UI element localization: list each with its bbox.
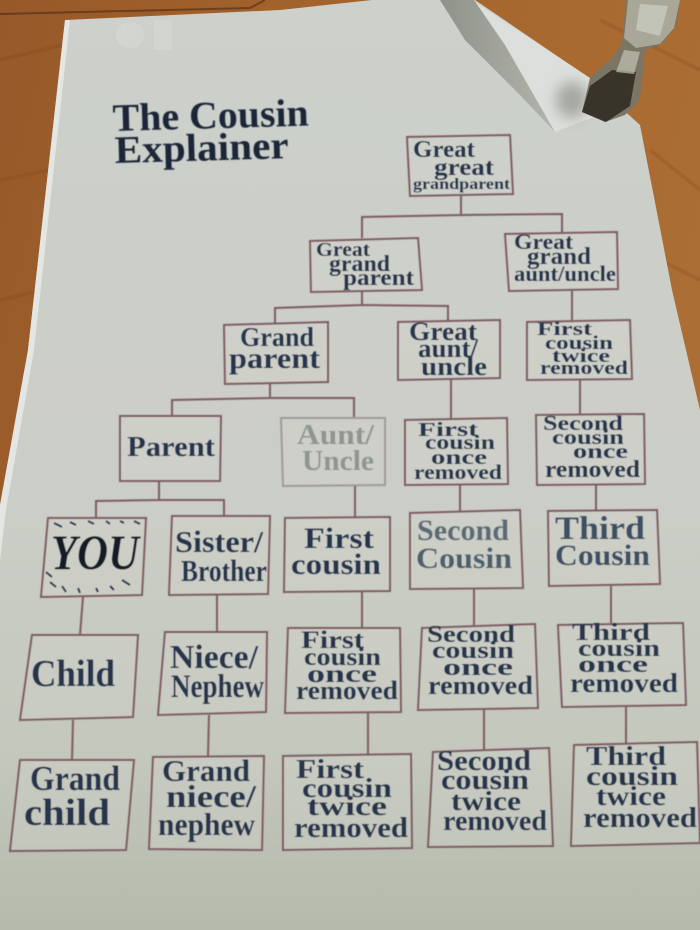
folded cloth corner xyxy=(440,0,625,132)
box: second cousin once removed: Second xyxy=(427,622,516,648)
faint show-through mark xyxy=(116,20,172,50)
box: aunt/uncle xyxy=(281,418,385,486)
box: great grand aunt/uncle: aunt/uncle xyxy=(514,261,616,286)
box: second cousin once removed: removed xyxy=(428,671,534,700)
box: aunt/uncle: Uncle xyxy=(302,445,374,477)
box: great grandparent: parent xyxy=(343,265,414,290)
box: great grandparent xyxy=(310,238,422,292)
box: first cousin once removed (upper): First xyxy=(418,419,478,441)
box: second cousin: Second xyxy=(417,514,509,547)
box: aunt/uncle: Aunt/ xyxy=(297,419,375,451)
box: grandparent xyxy=(224,322,328,384)
box: first cousin once removed: cousin xyxy=(304,644,381,671)
box: grandchild: Grand xyxy=(30,759,120,798)
box: child xyxy=(20,635,138,720)
box: grand niece/nephew xyxy=(149,753,264,850)
box: first cousin xyxy=(284,517,390,592)
box: third cousin twice removed: twice xyxy=(596,781,666,811)
icon: pepper mill xyxy=(582,0,680,122)
box: first cousin once removed: removed xyxy=(296,676,399,705)
box: grandchild: child xyxy=(24,792,110,834)
box: first cousin: First xyxy=(304,522,374,555)
box: first cousin once removed (upper): removed xyxy=(414,460,502,484)
box: you: YOU xyxy=(51,524,141,580)
box: third cousin: Third xyxy=(555,511,645,547)
box: second cousin once removed: once xyxy=(443,655,514,681)
box: parent: Parent xyxy=(127,431,215,463)
box: second cousin twice removed xyxy=(428,746,553,847)
box: first cousin twice removed xyxy=(283,754,412,850)
box: second cousin once removed (upper): removed xyxy=(545,457,641,483)
box: sister/brother: Brother xyxy=(181,553,267,588)
box: great grand aunt/uncle: Great xyxy=(514,229,574,254)
box: third cousin once removed: removed xyxy=(570,668,678,698)
box: second cousin twice removed: cousin xyxy=(441,765,529,796)
box: second cousin once removed (upper): once xyxy=(573,439,628,463)
box: first cousin once removed (upper): cousin xyxy=(425,432,495,454)
box: second cousin once removed: cousin xyxy=(432,638,514,664)
box: first cousin once removed (upper) xyxy=(405,418,508,485)
box: grand niece/nephew: nephew xyxy=(158,806,255,842)
box: great grand aunt/uncle xyxy=(505,229,618,291)
box: second cousin once removed (upper): Second xyxy=(543,411,623,435)
box: second cousin once removed (upper) xyxy=(536,411,645,485)
box: grand niece/nephew: niece/ xyxy=(166,778,257,814)
box: child: Child xyxy=(31,653,115,695)
box: second cousin once removed (upper): cousin xyxy=(552,425,624,449)
box: niece/nephew: Nephew xyxy=(171,669,264,705)
box: great grandparent: Great xyxy=(316,239,370,261)
box: third cousin once removed: once xyxy=(578,652,649,678)
box: third cousin twice removed xyxy=(571,741,700,846)
box: first cousin once removed (upper): once xyxy=(431,447,487,469)
box: third cousin once removed: Third xyxy=(572,620,651,646)
box: niece/nephew: Niece/ xyxy=(170,639,259,676)
box: second cousin xyxy=(410,510,523,589)
box: grandparent: Grand xyxy=(240,322,314,352)
box: third cousin: Cousin xyxy=(555,539,650,572)
box: first cousin twice removed (upper): First xyxy=(537,319,593,340)
box: first cousin twice removed (upper): removed xyxy=(540,358,629,379)
box: third cousin twice removed: Third xyxy=(586,741,666,771)
title: The Cousin xyxy=(112,92,309,140)
box: great great grandparent xyxy=(407,135,513,196)
box: grandchild xyxy=(10,759,134,851)
box: grand niece/nephew: Grand xyxy=(162,753,250,788)
box: great aunt/uncle: aunt/ xyxy=(418,334,479,363)
box: first cousin: cousin xyxy=(291,548,381,581)
box: great great grandparent: Great xyxy=(413,137,475,163)
box: second cousin twice removed: removed xyxy=(443,806,547,837)
box: sister/brother xyxy=(169,516,270,595)
box: great aunt/uncle xyxy=(398,317,500,381)
box: great great grandparent: great xyxy=(434,155,494,181)
box: grandparent: parent xyxy=(229,342,320,375)
box: second cousin once removed xyxy=(418,622,538,710)
box: great aunt/uncle: Great xyxy=(409,317,477,346)
box: third cousin twice removed: cousin xyxy=(586,761,678,791)
box: first cousin once removed: once xyxy=(307,661,377,688)
tree connector lines xyxy=(72,196,626,760)
box: third cousin once removed: cousin xyxy=(578,636,660,662)
box: great grand aunt/uncle: grand xyxy=(527,244,592,270)
box: third cousin twice removed: removed xyxy=(583,803,697,834)
box: first cousin twice removed (upper) xyxy=(527,319,632,380)
box: great great grandparent: grandparent xyxy=(413,176,511,193)
box: great grandparent: grand xyxy=(329,251,390,276)
box: parent xyxy=(120,416,221,481)
box: first cousin twice removed: removed xyxy=(294,813,408,844)
box: you xyxy=(41,518,146,597)
box: third cousin xyxy=(548,510,660,586)
title: Explainer xyxy=(114,124,289,172)
box: sister/brother: Sister/ xyxy=(175,524,263,559)
box: great aunt/uncle: uncle xyxy=(421,352,487,381)
box: first cousin twice removed (upper): twice xyxy=(552,346,610,367)
title xyxy=(112,92,309,172)
box: second cousin twice removed: twice xyxy=(451,786,521,816)
box: second cousin: Cousin xyxy=(416,542,512,575)
box: second cousin twice removed: Second xyxy=(437,746,531,777)
box: third cousin once removed xyxy=(558,620,686,707)
box: first cousin twice removed: First xyxy=(296,754,364,784)
box: first cousin twice removed (upper): cousin xyxy=(545,333,614,354)
box: first cousin twice removed: twice xyxy=(307,791,387,821)
box: first cousin once removed: First xyxy=(301,627,365,654)
box: niece/nephew xyxy=(158,632,267,715)
box: first cousin once removed xyxy=(285,627,401,713)
box: first cousin twice removed: cousin xyxy=(302,773,392,803)
